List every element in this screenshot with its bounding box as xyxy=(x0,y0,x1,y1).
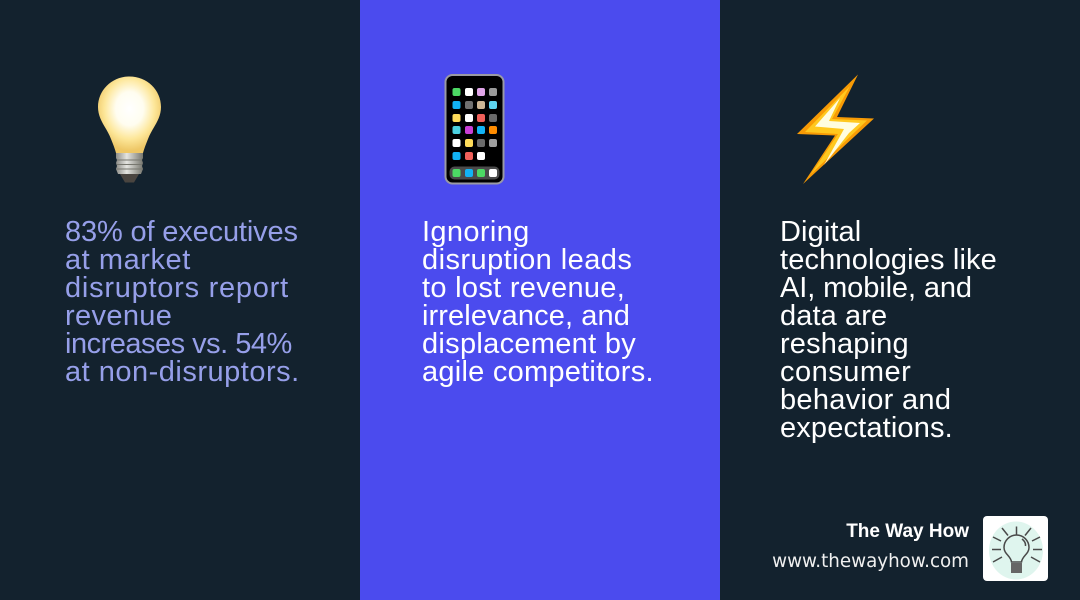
text: ignoring disruption: Ignoring xyxy=(422,216,530,248)
brand url: www.thewayhow.com xyxy=(772,551,969,572)
text: digital technologies: technologies like xyxy=(780,244,997,276)
text: ignoring disruption: agile competitors. xyxy=(422,356,654,388)
text: digital technologies: AI, mobile, and xyxy=(780,272,972,304)
icon: light bulb xyxy=(98,76,161,182)
panel: middle xyxy=(360,0,720,600)
text: ignoring disruption: to lost revenue, xyxy=(422,272,625,304)
text: digital technologies: reshaping xyxy=(780,328,909,360)
text: revenue statistic xyxy=(65,216,300,388)
text: digital technologies: expectations. xyxy=(780,412,953,444)
text: ignoring disruption: irrelevance, and xyxy=(422,300,630,332)
brand name: The Way How xyxy=(846,521,969,542)
text: revenue statistic: increases vs. 54% xyxy=(65,328,292,360)
text: ignoring disruption xyxy=(422,216,654,388)
icon: lightning bolt xyxy=(797,74,874,184)
icon: mobile phone xyxy=(444,74,504,184)
text: ignoring disruption: disruption leads xyxy=(422,244,632,276)
text: digital technologies: Digital xyxy=(780,216,861,248)
panel: left xyxy=(0,0,360,600)
text: digital technologies: consumer xyxy=(780,356,911,388)
text: digital technologies: behavior and xyxy=(780,384,951,416)
text: revenue statistic: 83% of executives xyxy=(65,216,298,248)
text: revenue statistic: at non-disruptors. xyxy=(65,356,300,388)
text: digital technologies: data are xyxy=(780,300,887,332)
text: revenue statistic: disruptors report xyxy=(65,272,289,304)
text: ignoring disruption: displacement by xyxy=(422,328,636,360)
text: revenue statistic: revenue xyxy=(65,300,172,332)
panel: right xyxy=(720,0,1080,600)
logo xyxy=(983,516,1048,581)
text: digital technologies xyxy=(780,216,997,444)
text: revenue statistic: at market xyxy=(65,244,191,276)
